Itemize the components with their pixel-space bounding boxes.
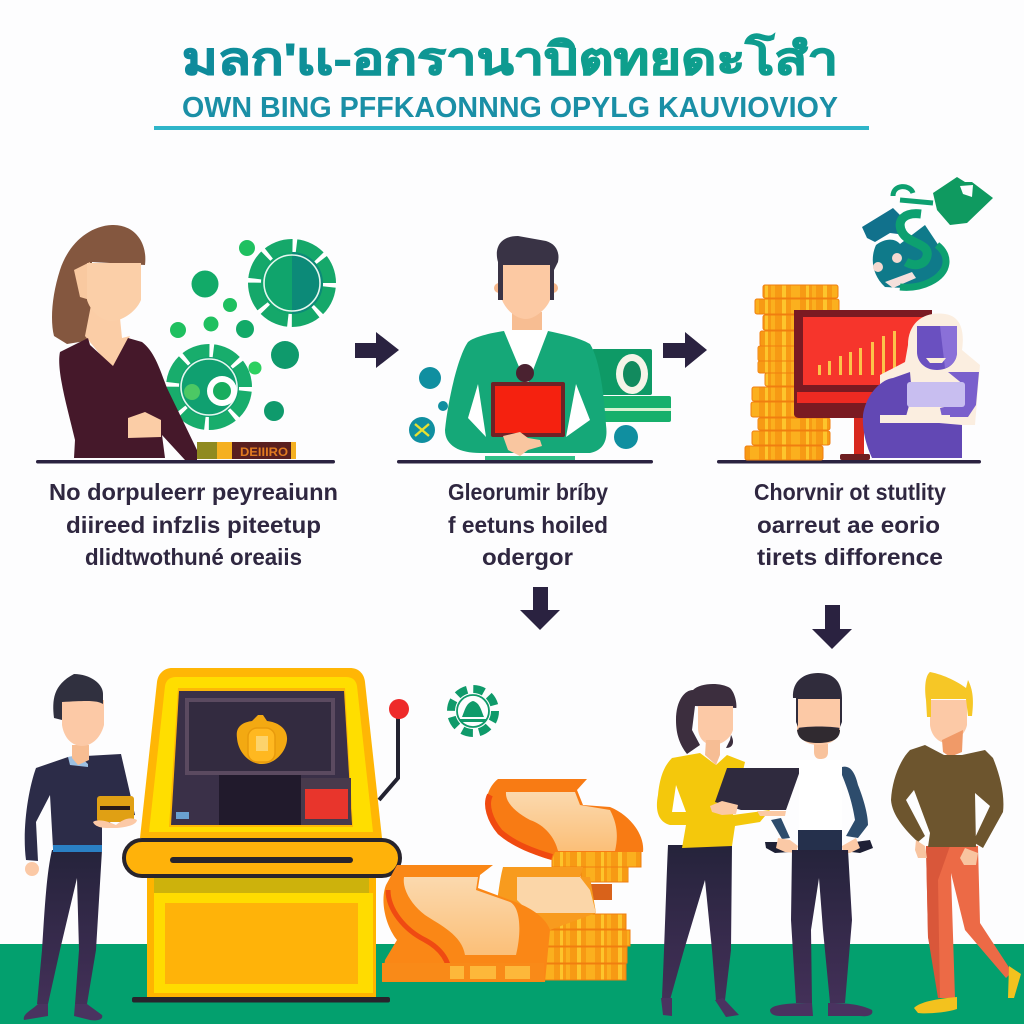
title: มลก'เเ-อกรานาบิตทยดะโสำ [182, 32, 838, 84]
icon: puzzle money [862, 177, 993, 288]
baseline [397, 460, 653, 464]
text block: step 2 caption [448, 479, 608, 570]
text block: step 2 caption: Gleorumir bríby [448, 479, 608, 505]
icon: golden crown [237, 715, 287, 764]
title rule [154, 126, 869, 130]
icon: green casino chip [451, 689, 495, 733]
person: bearded man [765, 673, 873, 1016]
book [197, 442, 296, 459]
text block: step 1 caption: diireed infzlis piteetup [66, 512, 321, 538]
baseline [36, 460, 335, 464]
icon: small chips [170, 240, 299, 421]
arrow: down from step 3 [812, 605, 852, 649]
icon: robot figure [863, 314, 980, 458]
laptop [715, 768, 801, 810]
person: man holding card [24, 674, 137, 1020]
text block: step 3 caption: tirets difforence [757, 544, 943, 570]
screen [171, 691, 352, 825]
icon: coin stack [745, 285, 839, 460]
person: blond man [891, 672, 1021, 1013]
arrow: step 1 to 2 [355, 332, 399, 368]
right stack [544, 851, 641, 980]
icon: banknote [567, 349, 671, 422]
icon: stacked coins [382, 779, 643, 982]
panel: step 2 man with tablet [397, 236, 671, 464]
text block: step 2 caption: f eetuns hoiled [448, 512, 608, 538]
baseline [717, 460, 981, 464]
icon: large chip top [255, 246, 329, 320]
book: DEIIIRO [240, 445, 288, 459]
arrow: down from step 2 [520, 587, 560, 630]
panel: step 1 woman with chips [36, 225, 335, 464]
icon: teal coins [409, 367, 638, 449]
upper ribbon [487, 779, 643, 860]
man figure [445, 236, 606, 460]
cabinet base [132, 877, 390, 1002]
slot machine [124, 668, 409, 1002]
text block: step 3 caption: Chorvnir ot stutlity [754, 479, 946, 505]
text block: step 3 caption [754, 479, 946, 570]
middle ribbon [497, 867, 596, 930]
arrow: step 2 to 3 [663, 332, 707, 368]
lever [379, 699, 409, 800]
icon: monitor [794, 310, 932, 460]
subtitle: OWN BING PFFKAONNNG OPYLG KAUVIOVIOY [182, 92, 838, 124]
text block: step 1 caption [49, 479, 338, 570]
text block: step 2 caption: odergor [482, 544, 573, 570]
text block: step 1 caption: dlidtwothuné oreaiis [85, 544, 302, 570]
woman figure [52, 225, 197, 460]
control bar [124, 840, 400, 876]
cabinet top [140, 668, 382, 838]
text block: step 3 caption: oarreut ae eorio [757, 512, 940, 538]
panel: step 3 coins monitor and robot [717, 177, 993, 464]
icon: large chip bottom [173, 351, 245, 423]
ground band [0, 944, 1024, 1024]
person: woman with laptop [657, 684, 801, 1017]
text block: step 1 caption: No dorpuleerr peyreaiunn [49, 479, 338, 505]
lower ribbon [382, 865, 550, 982]
